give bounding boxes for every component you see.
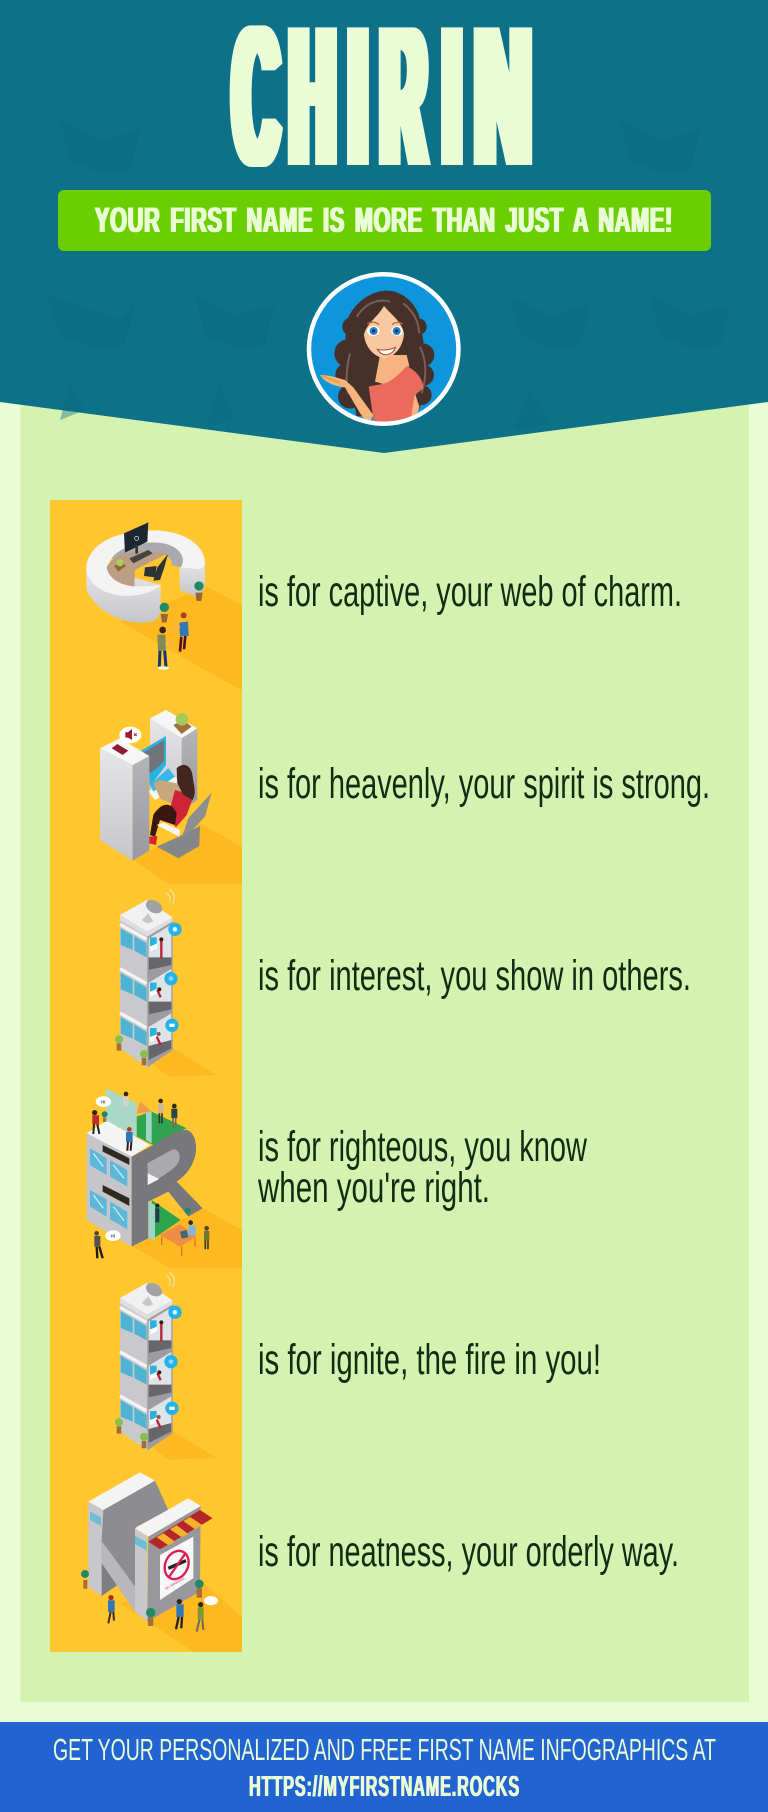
letter illustration column [50,500,242,1652]
lower terrace [152,1200,181,1238]
rooftop terrace [106,1088,187,1145]
icon: desk and keyboard [148,768,182,800]
text row: R: is for righteous, you know [258,1123,588,1171]
text row: R: when you're right. [257,1164,490,1212]
hair [334,291,434,417]
speech bubbles [96,1096,121,1241]
speech bubble [204,1596,218,1605]
illustration: letter N building [81,1472,242,1652]
icon: screen [137,736,166,787]
avatar: woman in circle [307,272,461,426]
text row: R [257,1123,588,1212]
icon: muted speaker bubble [119,727,141,743]
office floors [149,925,171,1060]
illustration: letter H workstation [100,710,242,884]
icon: keyboard [129,550,153,563]
icon: plants [115,1418,148,1448]
no smoking sign [160,1537,193,1600]
letter R face [132,1130,203,1247]
icon: plants [81,1570,204,1626]
illustration: letter I tower [115,889,217,1077]
icon: satellite dish [142,889,174,923]
table [160,1224,197,1256]
icon: social bubbles [164,1306,182,1415]
striped awning [148,1510,213,1549]
speech bubbles: HI [101,1099,105,1104]
header banner [0,0,768,453]
figures [108,1595,204,1632]
content panel [20,380,749,1702]
icon: chair [157,793,212,858]
figures: two people talking [157,612,189,670]
icon: desk plant [114,562,126,572]
figures [92,1092,209,1258]
windows and signs [90,1145,129,1229]
icon: satellite dish [142,1272,174,1306]
icon: red book [112,744,128,755]
icon: plants [115,1035,148,1065]
illustration: letter C reception desk [86,522,242,690]
footer [0,1722,768,1812]
icon: potted plants [160,581,204,622]
icon: plant on tower [173,713,192,734]
office floors [149,1308,171,1443]
icon: monitor [124,522,148,554]
figure: woman at desk [149,765,195,845]
illustration: second letter I tower [115,1272,217,1460]
icon: office chair [144,554,168,581]
no smoking sign: NO SMOKING [164,1576,186,1591]
text row: I second: is for ignite, the fire in you! [258,1336,601,1384]
illustration: letter R building [87,1088,242,1268]
speech bubbles: HI [111,1233,115,1238]
windows [120,1307,147,1429]
windows [120,924,147,1046]
icon: social bubbles [164,923,182,1032]
footer: HTTPS://MYFIRSTNAME.ROCKS [249,1771,520,1803]
windows [90,1512,147,1551]
tagline banner [58,190,711,251]
